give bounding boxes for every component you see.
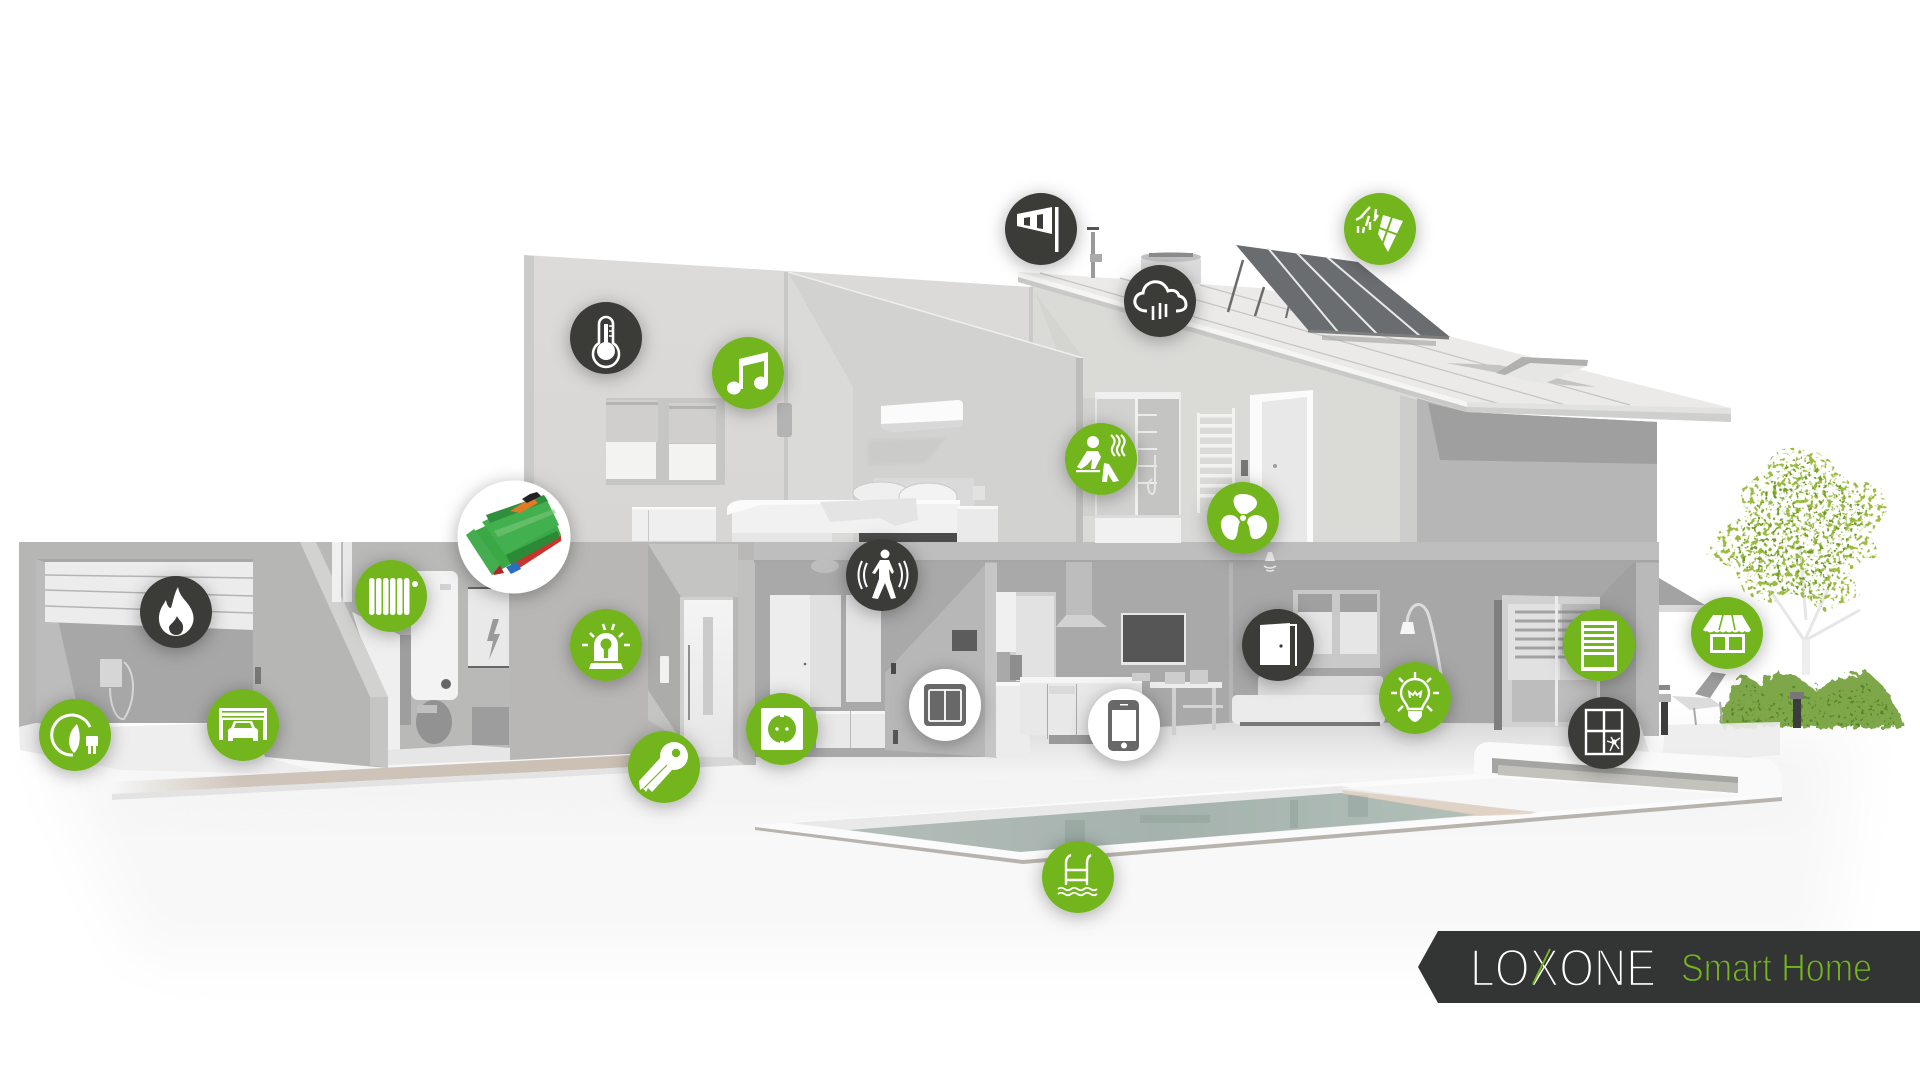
bubble: fire	[140, 576, 212, 648]
patio deck	[1662, 722, 1780, 765]
bubble: blinds	[1563, 609, 1635, 681]
bubble: wind	[1005, 193, 1077, 265]
patio door with blinds	[1494, 595, 1600, 730]
entrance wall and door	[648, 542, 756, 768]
bubble: rain	[1124, 265, 1196, 337]
bubble: switch	[909, 669, 981, 741]
shower cabin	[1083, 392, 1181, 543]
garden lamps	[1658, 685, 1804, 735]
ground shadow	[40, 725, 1860, 960]
upper floor: back walls	[524, 255, 1417, 545]
water tank	[411, 571, 458, 744]
driveway paving	[112, 755, 632, 800]
bubble: lighting	[1379, 662, 1451, 734]
bubble: solar energy	[1344, 193, 1416, 265]
ground floor surface	[755, 722, 1650, 775]
bubble: electric car charging	[39, 699, 111, 771]
air conditioner	[881, 400, 963, 432]
sun lounger	[1672, 672, 1726, 725]
bubble: sauna	[1065, 423, 1137, 495]
cooker hood	[1056, 562, 1107, 627]
electrical cabinet	[468, 587, 509, 745]
bed	[727, 478, 998, 542]
exterior wall right	[1417, 398, 1657, 562]
dining table and chairs	[1132, 670, 1223, 735]
bubble: socket	[746, 693, 818, 765]
swimming pool	[755, 773, 1782, 864]
shrubs	[1722, 672, 1905, 727]
bubble: broken window	[1568, 697, 1640, 769]
living window	[1293, 590, 1380, 668]
ceiling sensor	[1264, 552, 1276, 571]
floor lamp	[1400, 604, 1441, 674]
garage roller door	[45, 562, 253, 630]
rooftop weather station	[1087, 227, 1102, 278]
pool cover roller	[1474, 742, 1782, 796]
bubble: music	[712, 337, 784, 409]
miniserver controller	[458, 480, 570, 594]
skylight	[1446, 357, 1596, 387]
utility floor	[388, 745, 510, 765]
heating unit	[352, 612, 411, 755]
bubble: alarm	[570, 609, 642, 681]
bubble: temperature	[570, 302, 642, 374]
bubble: awning	[1691, 597, 1763, 669]
bathroom door	[1241, 390, 1313, 542]
roof	[1018, 272, 1731, 422]
patio roof	[1659, 578, 1705, 612]
rooftop vent	[1141, 252, 1201, 284]
towel radiator	[1197, 408, 1235, 513]
bedroom window	[606, 398, 725, 485]
kitchen	[996, 592, 1149, 757]
ground floor rooms back walls	[755, 560, 1659, 760]
bubble: heating	[355, 560, 427, 632]
bubble: key	[628, 731, 700, 803]
garage and utility ground walls	[19, 542, 648, 775]
tree	[1706, 447, 1888, 675]
wardrobe	[770, 595, 977, 748]
bubble: garage	[207, 689, 279, 761]
bubble: door contact	[1242, 609, 1314, 681]
bubble: motion sensor	[846, 539, 918, 611]
logo text LOXONE: LOXONE	[1470, 939, 1656, 998]
bubble: smartphone	[1088, 689, 1160, 761]
wall box charger	[100, 659, 133, 719]
logo X accent	[1533, 949, 1550, 984]
garage sensor	[255, 667, 261, 684]
dresser	[632, 507, 716, 541]
bubble: pool	[1042, 841, 1114, 913]
wall speaker	[777, 403, 792, 437]
solar panels	[1228, 245, 1450, 346]
brand banner	[1418, 931, 1920, 1003]
bubble: ventilation	[1207, 482, 1279, 554]
television	[1121, 613, 1186, 665]
heating pipes	[332, 542, 352, 602]
floor slab	[754, 542, 1659, 562]
tagline Smart Home: Smart Home	[1681, 947, 1872, 990]
sofa	[1232, 676, 1385, 726]
ceiling fixture	[811, 559, 839, 573]
